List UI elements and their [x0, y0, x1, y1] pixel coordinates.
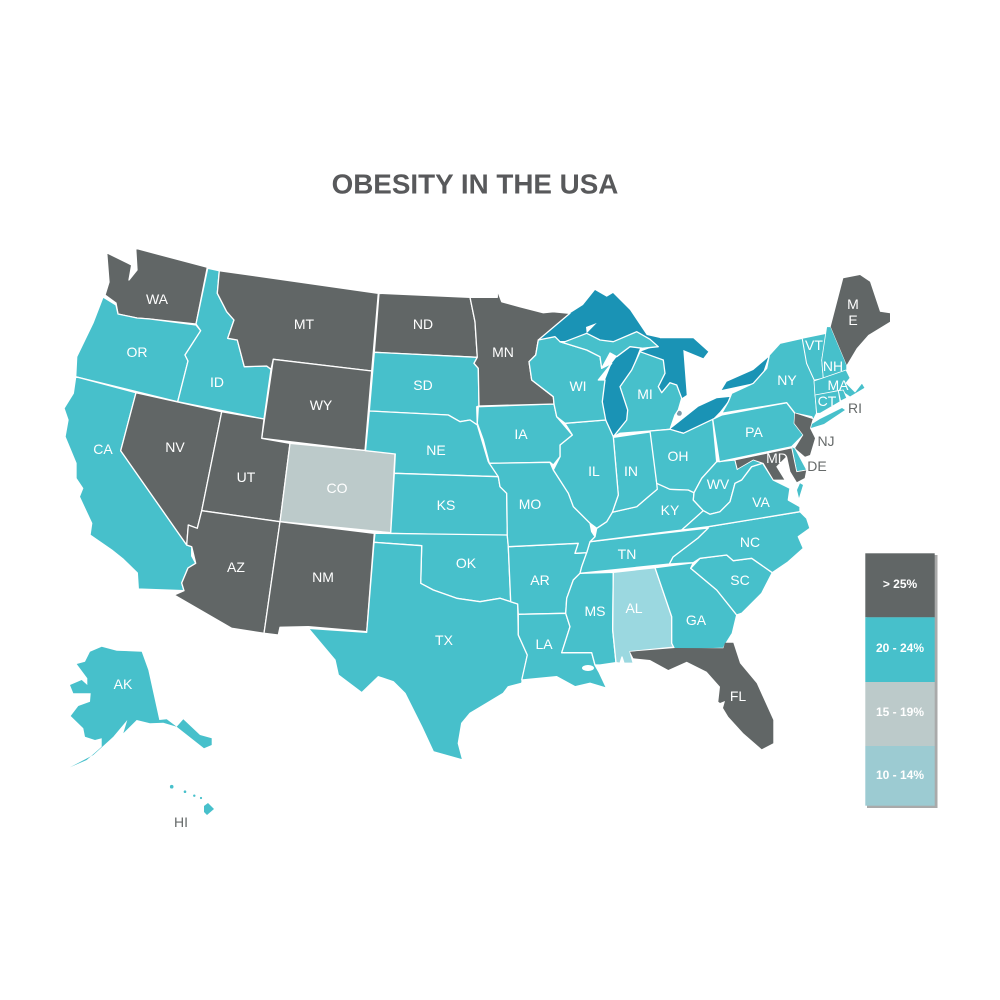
lake: Erie — [670, 397, 732, 433]
label MA: MA — [828, 377, 849, 393]
label LA: LA — [535, 636, 553, 652]
state: OK — [374, 533, 511, 602]
lake: Ontario — [722, 357, 768, 390]
label CT: CT — [818, 393, 837, 409]
label AZ: AZ — [227, 559, 245, 575]
state: KS — [391, 473, 507, 536]
label SC: SC — [730, 572, 750, 588]
state: PA — [713, 403, 803, 462]
label AL: AL — [625, 600, 643, 616]
state: DE — [792, 447, 807, 472]
label PA: PA — [745, 424, 763, 440]
state: ME — [831, 275, 890, 365]
label WA: WA — [146, 291, 169, 307]
state: LA — [518, 613, 607, 688]
state: NC — [669, 512, 810, 573]
state: CO — [280, 443, 395, 533]
state: WA — [105, 248, 207, 324]
label HI: HI — [174, 814, 188, 830]
label FL: FL — [730, 688, 746, 704]
state: TN — [580, 528, 708, 573]
label DE: DE — [807, 458, 827, 474]
label ME: M — [847, 296, 859, 312]
state: IA — [477, 404, 572, 465]
label KS: KS — [437, 497, 455, 513]
state: IL — [553, 420, 618, 528]
label ME: E — [848, 312, 858, 328]
state: MI lower — [613, 352, 682, 437]
state: VT — [802, 333, 827, 380]
state: RI — [838, 390, 847, 401]
label TN: TN — [618, 546, 636, 562]
label TX: TX — [435, 632, 454, 648]
state: MS — [562, 572, 616, 665]
legend shadow — [867, 555, 938, 808]
state: SD — [369, 352, 479, 425]
state: VA eastern shore — [797, 483, 803, 498]
label NY: NY — [777, 372, 797, 388]
label NC: NC — [740, 534, 760, 550]
legend swatch: 20-24%: 20 - 24% — [876, 641, 924, 655]
lake: Huron — [640, 338, 708, 398]
label AR: AR — [530, 572, 550, 588]
label IA: IA — [514, 426, 528, 442]
label VT: VT — [805, 337, 823, 353]
label ND: ND — [413, 316, 433, 332]
state: FL — [630, 643, 773, 749]
label ID: ID — [210, 374, 224, 390]
label OR: OR — [126, 344, 148, 360]
state: AZ — [174, 511, 280, 633]
state: NH — [822, 327, 847, 378]
legend swatch: 20-24% — [865, 617, 935, 682]
label OK: OK — [456, 555, 477, 571]
title: OBESITY IN THE USA — [332, 168, 618, 200]
label NV: NV — [165, 439, 185, 455]
state: MI upper — [560, 332, 658, 368]
label VA: VA — [752, 494, 770, 510]
label MI: MI — [637, 386, 653, 402]
label MD: MD — [766, 450, 788, 466]
state: WV — [693, 458, 763, 514]
label MO: MO — [519, 496, 541, 512]
label OH: OH — [668, 448, 688, 464]
state: OH — [650, 419, 717, 493]
label UT: UT — [237, 469, 256, 485]
state: AL — [613, 568, 675, 663]
legend swatch: 10-14%: 10 - 14% — [876, 768, 924, 782]
label WV: WV — [707, 476, 730, 492]
state: UT — [202, 412, 290, 522]
state: ND — [374, 293, 477, 357]
state: NY Long Island — [811, 408, 845, 428]
state: AR — [508, 543, 587, 614]
label GA: GA — [686, 612, 707, 628]
legend swatch: 15-19% — [865, 682, 935, 746]
label AK: AK — [114, 676, 133, 692]
label CO: CO — [326, 480, 348, 496]
map of states — [64, 248, 890, 815]
label WY: WY — [310, 397, 333, 413]
lake: Superior — [538, 290, 660, 347]
label RI: RI — [848, 400, 862, 416]
state: HI — [170, 785, 214, 815]
label NJ: NJ — [817, 433, 835, 449]
label KY: KY — [661, 502, 680, 518]
state: ID — [178, 268, 271, 419]
label IN: IN — [624, 463, 638, 479]
lake: Michigan — [602, 347, 640, 437]
state: MA — [814, 370, 865, 397]
label MS: MS — [584, 603, 606, 619]
state: NV — [121, 393, 222, 545]
label MN: MN — [492, 344, 514, 360]
state: CT — [815, 391, 840, 413]
state: WI — [529, 337, 612, 423]
label NE: NE — [426, 442, 446, 458]
state: OR — [76, 297, 201, 402]
lake: St. Clair — [677, 411, 682, 416]
state: TX — [308, 542, 527, 760]
state: NY — [722, 338, 817, 420]
state: IN — [612, 432, 657, 512]
state: KY — [590, 483, 703, 542]
state: NM — [264, 522, 374, 635]
state: MO — [489, 462, 595, 553]
label NM: NM — [312, 569, 334, 585]
legend swatch: 15-19%: 15 - 19% — [876, 705, 924, 719]
state: AK — [70, 647, 212, 767]
state: MN — [470, 290, 570, 406]
state: MT — [217, 271, 378, 371]
legend — [865, 553, 938, 808]
label NH: NH — [823, 358, 843, 374]
state: GA — [655, 563, 737, 650]
label IL: IL — [588, 463, 600, 479]
state: WY — [262, 359, 372, 451]
state labels — [93, 291, 862, 830]
legend swatch: over 25% — [865, 553, 935, 617]
state: SC — [691, 555, 772, 615]
label ME — [847, 296, 859, 328]
label SD: SD — [413, 377, 433, 393]
state: VA — [682, 463, 800, 530]
label CA: CA — [93, 441, 113, 457]
state: CA — [64, 377, 196, 591]
lake: Pontchartrain — [582, 665, 594, 671]
state: NJ — [794, 413, 815, 457]
state: MD — [735, 448, 807, 483]
legend swatch: over 25%: > 25% — [883, 577, 918, 591]
label MT: MT — [294, 316, 315, 332]
label WI: WI — [569, 378, 587, 394]
state: NE — [366, 411, 498, 477]
legend swatch: 10-14% — [865, 746, 935, 806]
